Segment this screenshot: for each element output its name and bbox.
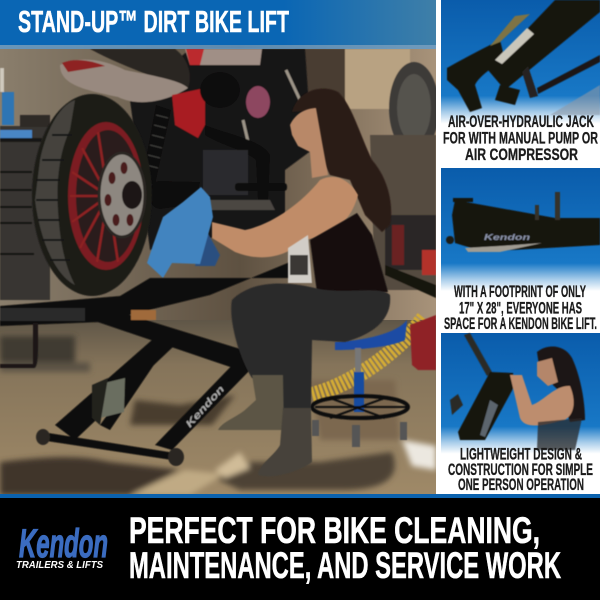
header band <box>0 0 436 45</box>
footer band <box>0 498 600 600</box>
her face <box>537 358 558 386</box>
her hair <box>537 346 585 422</box>
lift deck <box>0 262 290 326</box>
jack caption <box>443 113 598 164</box>
motorcycle <box>60 49 312 250</box>
scissor leg left <box>55 332 175 440</box>
her top <box>537 418 582 450</box>
red oil cover <box>172 88 205 138</box>
black leggings <box>231 284 390 410</box>
rear boot <box>218 375 284 430</box>
air hose <box>312 318 424 395</box>
her arms <box>510 375 574 426</box>
panel background <box>441 168 600 332</box>
shock absorber <box>147 105 171 184</box>
header band light edge <box>0 45 436 49</box>
logo: Kendon Trailers & Lifts <box>16 522 108 571</box>
footer blue rule <box>0 494 600 498</box>
spokes <box>70 132 118 262</box>
face <box>290 108 328 178</box>
bike body dark mass <box>130 49 312 250</box>
woman lifting folded lift photo <box>450 333 585 450</box>
tyre tread highlight <box>35 100 75 285</box>
garage wall <box>0 45 436 335</box>
left caster <box>36 429 50 445</box>
main photo: woman cleaning motorcycle on lift <box>0 45 439 500</box>
panel: lightweight design <box>441 333 600 494</box>
title: STAND-UP™ DIRT BIKE LIFT <box>18 4 289 39</box>
panel: air-over-hydraulic jack <box>441 0 600 165</box>
chrome engine accents <box>243 70 300 150</box>
lightweight caption <box>448 446 593 494</box>
panel background <box>441 333 600 494</box>
foot peg <box>235 183 287 191</box>
rear fender <box>60 60 188 102</box>
muffler <box>152 181 162 209</box>
scissor beam <box>98 314 244 368</box>
footprint caption <box>444 283 597 333</box>
toolbox at left <box>0 68 50 300</box>
panel: footprint <box>441 168 600 333</box>
motorcycle lift <box>0 262 290 466</box>
fuel tank <box>185 49 262 65</box>
panel background <box>441 0 600 165</box>
tyre tread lines <box>36 135 72 260</box>
floor shadows <box>0 334 436 494</box>
seat <box>90 49 190 88</box>
front boot <box>258 408 312 476</box>
tyre <box>32 94 152 296</box>
logo: Kendon Trailers & Lifts: TRAILERS & LIFTS <box>16 559 103 571</box>
rear wheel <box>32 94 152 296</box>
stool <box>312 320 408 447</box>
woman <box>212 89 436 476</box>
air filter <box>246 86 270 118</box>
blue towel <box>147 187 220 278</box>
base rail <box>48 432 170 460</box>
lift logo: Kendon <box>184 384 227 430</box>
background shelves and fan <box>295 49 439 298</box>
hair <box>292 89 391 232</box>
logo: Kendon Trailers & Lifts: Kendon <box>19 522 108 566</box>
scissor leg right <box>154 366 249 450</box>
garage floor <box>0 320 436 500</box>
lift logo: Kendon <box>484 233 530 242</box>
folded lift photo <box>446 192 600 252</box>
black tank top <box>310 213 388 300</box>
exhaust pipes <box>205 125 270 200</box>
sprocket <box>99 153 145 237</box>
right caster <box>168 448 184 466</box>
air jack <box>100 378 125 418</box>
red compressor <box>410 315 436 370</box>
orange reflector <box>131 310 156 320</box>
arm <box>212 177 358 257</box>
red rim <box>68 122 144 270</box>
footer headline <box>129 510 561 586</box>
spray bottle <box>288 235 312 283</box>
centre leg <box>100 365 154 430</box>
jack photo <box>447 0 600 115</box>
